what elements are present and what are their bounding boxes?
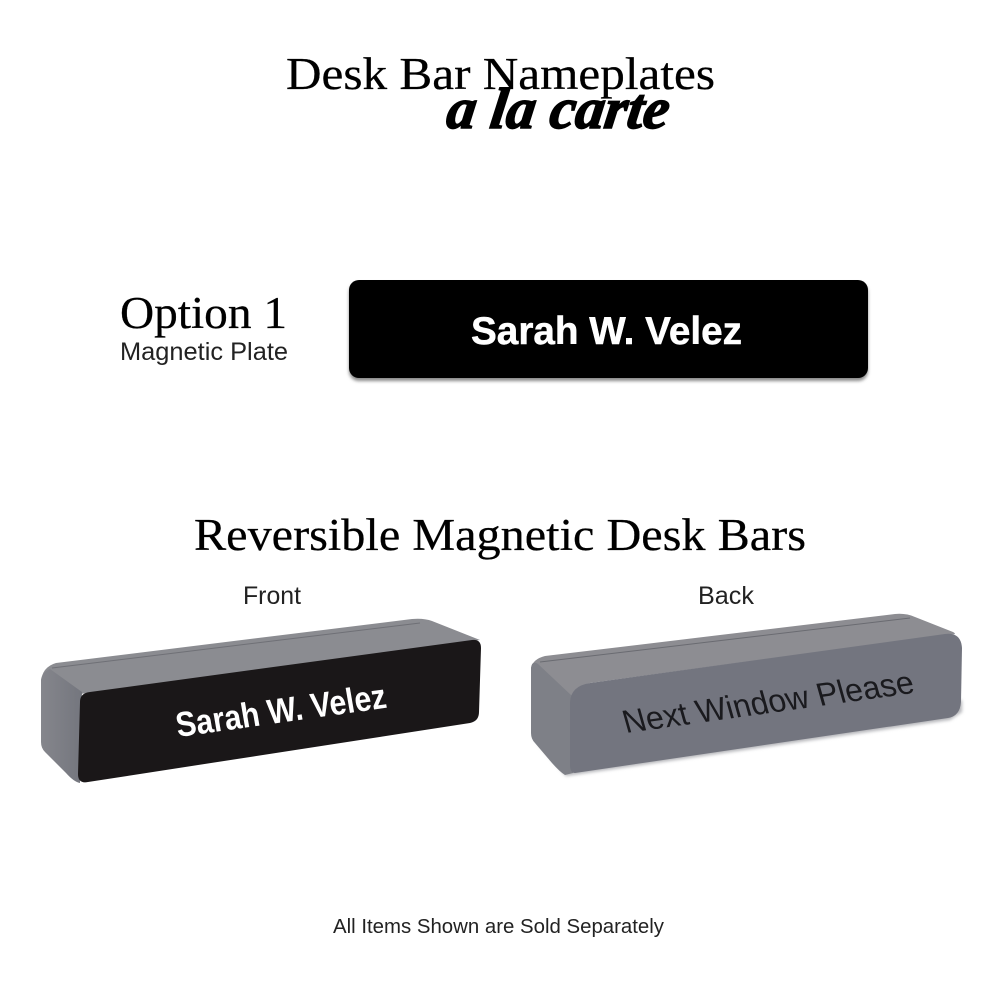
- back desk bar: [531, 614, 962, 776]
- back label: Back: [698, 582, 754, 610]
- title: [286, 48, 715, 141]
- heading: Desk Bar Nameplates: Desk Bar Nameplates: [286, 48, 715, 99]
- option heading: Option 1: [120, 288, 287, 338]
- option description: Magnetic Plate: [120, 338, 288, 366]
- section heading: reversible desk bars: Reversible Magnetic Desk Bars: [194, 510, 806, 560]
- bar top surface: [41, 619, 480, 694]
- bar end side: [41, 669, 82, 783]
- option 1 label: [120, 288, 288, 366]
- nameplate text: Sarah W. Velez: [471, 310, 742, 353]
- face plate text: Sarah W. Velez: [173, 677, 389, 745]
- grey face: [570, 634, 962, 773]
- bar end side: [531, 663, 573, 775]
- face text: Next Window Please: [618, 664, 918, 740]
- subheading: a la carte: a la carte: [443, 76, 674, 141]
- front desk bar: [41, 619, 481, 783]
- footer note: All Items Shown are Sold Separately: [333, 916, 664, 938]
- bar top surface: [531, 614, 955, 697]
- black face plate: [78, 640, 481, 782]
- magnetic nameplate: [349, 280, 868, 381]
- front label: Front: [243, 582, 301, 610]
- bar shadow: [533, 700, 962, 776]
